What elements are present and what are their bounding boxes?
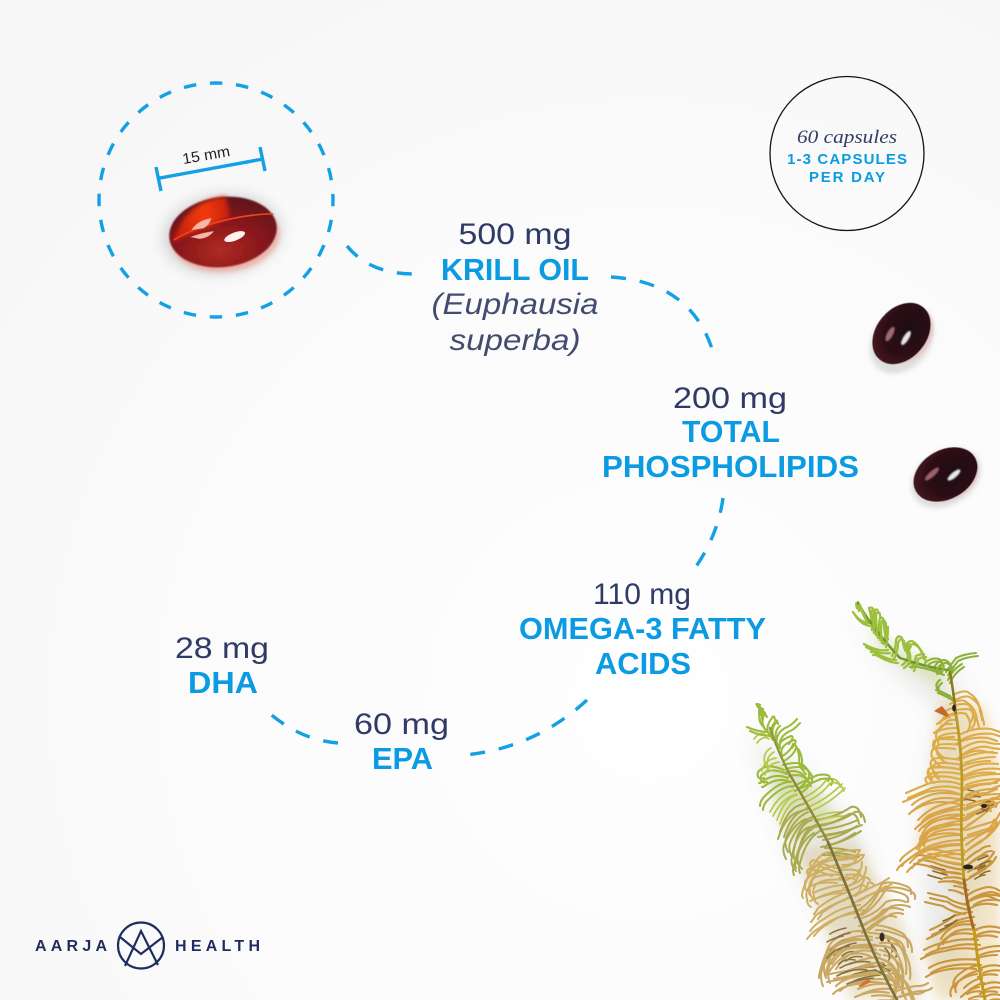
logo wordmark right: HEALTH <box>175 938 260 955</box>
moss colour body <box>770 625 1000 1000</box>
label: omega-3: 110 mg <box>593 578 691 611</box>
right sprig lower stem <box>950 672 956 715</box>
right sprig golden stem <box>956 715 964 880</box>
right sprig denser fronds <box>855 605 1000 1000</box>
connector arcs <box>268 246 723 755</box>
logo wordmark left: AARJA <box>35 938 107 955</box>
left sprig denser fronds <box>750 708 932 1000</box>
label: krill oil: (Euphausia <box>432 288 598 321</box>
label: total phospholipids: TOTAL <box>682 414 780 449</box>
right sprig green fronds <box>853 602 976 698</box>
label: omega-3 <box>519 578 766 681</box>
logo emblem <box>118 922 164 968</box>
label: epa: 60 mg <box>354 708 449 741</box>
label: dha: DHA <box>188 665 258 700</box>
left sprig gold fronds <box>805 850 928 1000</box>
label: krill oil: superba) <box>450 324 580 357</box>
left sprig stem <box>770 728 790 775</box>
label: krill oil: KRILL OIL <box>441 252 589 287</box>
label: krill oil <box>432 218 598 357</box>
capacity badge: 1-3 CAPSULES <box>787 151 907 168</box>
moss shadow <box>750 610 990 1000</box>
right sprig green upper stem <box>858 603 948 670</box>
right sprig orange bud <box>934 706 949 717</box>
label: total phospholipids: PHOSPHOLIPIDS <box>602 449 859 484</box>
red capsule photo <box>165 191 281 273</box>
capacity badge: 60 capsules <box>797 127 897 148</box>
capsule: dark upper <box>857 291 947 386</box>
capsule shadow <box>157 186 287 282</box>
label: dha: 28 mg <box>175 632 269 665</box>
logo <box>35 922 260 968</box>
label: epa: EPA <box>372 741 433 776</box>
capsule with size measure <box>156 143 287 282</box>
left sprig olive fronds <box>780 804 861 868</box>
capsule: dark lower <box>900 436 992 520</box>
label: dha <box>175 632 269 700</box>
label: omega-3: ACIDS <box>595 646 691 681</box>
label: epa <box>354 708 449 776</box>
right sprig red-brown stem <box>964 880 974 930</box>
label: omega-3: OMEGA-3 FATTY <box>519 611 766 646</box>
left sprig orange bit <box>858 979 871 987</box>
label: total phospholipids <box>602 382 859 484</box>
label: krill oil: 500 mg <box>458 218 572 251</box>
left sprig lower stem <box>828 842 897 1000</box>
capacity badge <box>770 76 924 230</box>
right sprig gold fronds <box>900 691 1000 997</box>
dashed circle around capsule <box>99 83 333 317</box>
capsule glow <box>168 198 284 278</box>
left sprig speck <box>880 932 884 942</box>
moss sprigs <box>747 602 1000 1000</box>
left sprig green fronds <box>747 704 842 820</box>
right sprig specks <box>952 704 987 870</box>
right sprig stem base <box>974 930 985 1000</box>
label: total phospholipids: 200 mg <box>673 382 787 415</box>
left sprig middle stem <box>790 775 828 842</box>
capacity badge: PER DAY <box>809 169 885 186</box>
ruler: 15 mm: 15 mm <box>181 143 231 168</box>
